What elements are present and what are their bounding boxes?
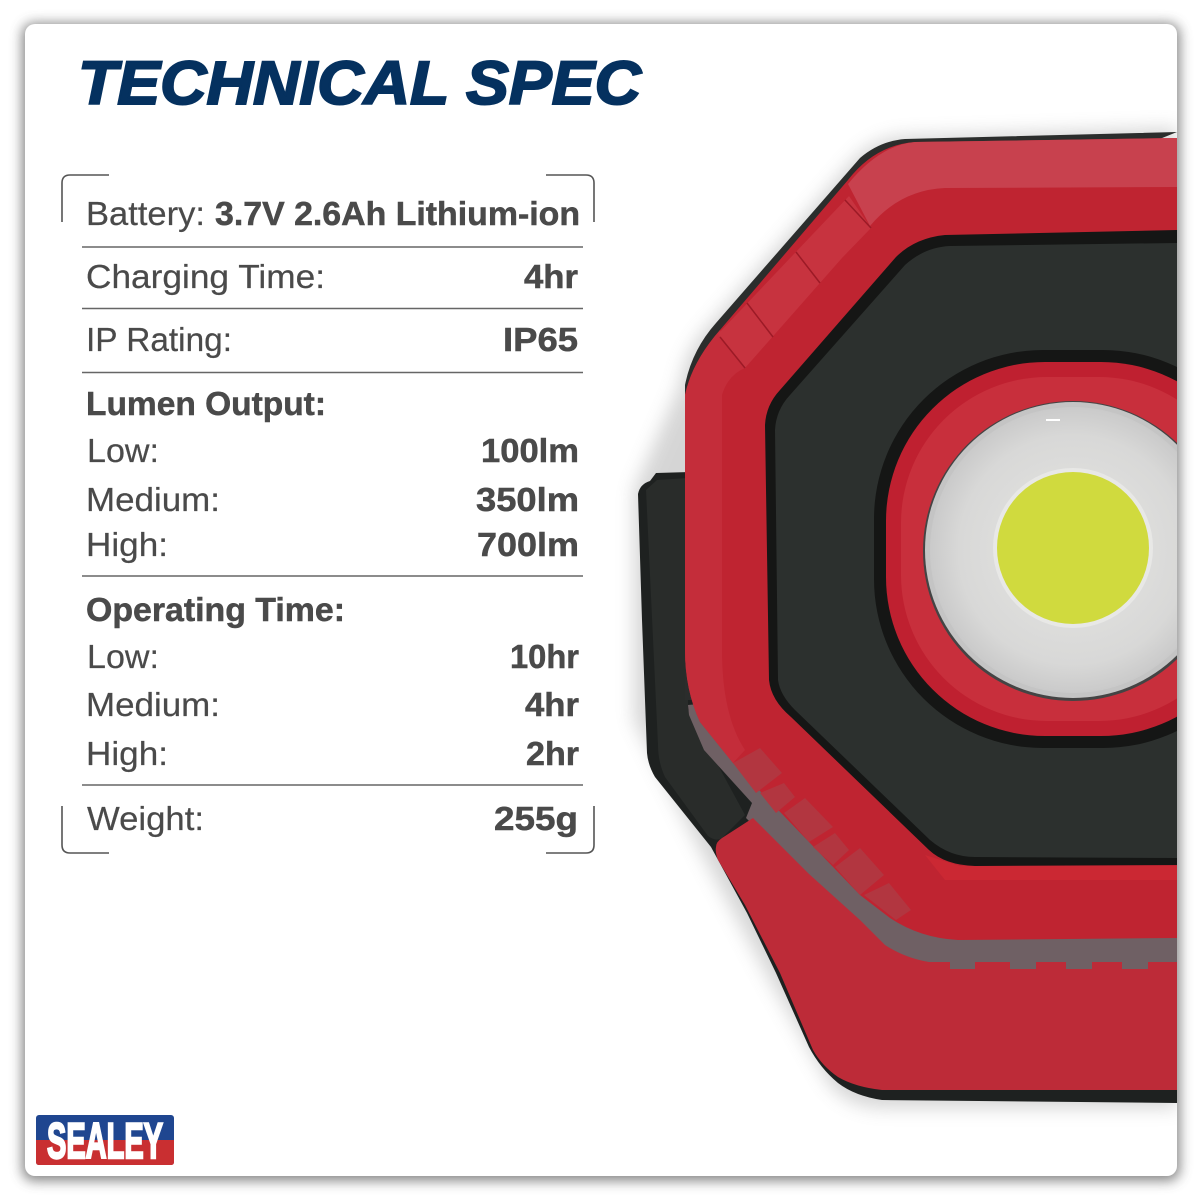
bezel: highlight band bbox=[848, 138, 1177, 226]
section: operating time: Operating Time: bbox=[86, 591, 345, 628]
row: IP rating bbox=[86, 321, 578, 358]
bezel: grip lines bbox=[720, 200, 871, 368]
logo: Sealey bbox=[36, 1113, 174, 1169]
logo: Sealey: SEALEY bbox=[47, 1113, 163, 1169]
dark face plate bbox=[775, 243, 1177, 858]
section: lumen output: Lumen Output: bbox=[86, 385, 326, 422]
bracket: top right bbox=[546, 175, 594, 222]
bracket: top left bbox=[62, 175, 109, 222]
black gasket bbox=[765, 230, 1177, 866]
stand: lighter black panel bbox=[646, 478, 745, 840]
section: operating time: 10hr bbox=[510, 638, 579, 675]
title: TECHNICAL SPEC bbox=[78, 49, 642, 117]
row: IP rating: IP Rating: bbox=[86, 321, 232, 358]
section: lumen output: 350lm bbox=[476, 481, 579, 518]
stand: red base bbox=[716, 818, 1177, 1090]
row: IP rating: IP65 bbox=[503, 321, 578, 358]
bracket: bottom right bbox=[546, 806, 594, 853]
red bezel bbox=[685, 138, 1177, 940]
bezel: left lighter band bbox=[685, 330, 745, 763]
section: operating time: 2hr bbox=[526, 735, 579, 772]
bracket: bottom left bbox=[62, 806, 109, 853]
section: lumen output: 100lm bbox=[481, 432, 579, 469]
section: lumen output: 700lm bbox=[477, 526, 579, 563]
bezel: lower highlight bbox=[925, 855, 1177, 880]
row: charging time: Charging Time: bbox=[86, 258, 325, 295]
spec table bbox=[62, 175, 594, 853]
row: weight: 255g bbox=[494, 800, 578, 837]
back shell edge bbox=[685, 132, 1177, 700]
bezel: translucent grip blocks bbox=[733, 748, 911, 920]
lens ring bbox=[874, 350, 1200, 748]
product photo: work light bbox=[634, 128, 1200, 1108]
row: charging time: 4hr bbox=[524, 258, 578, 295]
row: battery: Battery: bbox=[86, 195, 205, 232]
section: operating time: High: bbox=[86, 735, 168, 772]
stand: black bracket bbox=[638, 472, 1177, 1103]
section: operating time: 4hr bbox=[525, 686, 579, 723]
section: operating time: Low: bbox=[87, 638, 159, 675]
lens bbox=[923, 401, 1200, 701]
grey seal band bbox=[688, 700, 1177, 975]
row: weight: Weight: bbox=[87, 800, 204, 837]
row: charging time bbox=[86, 258, 578, 295]
row: battery: 3.7V 2.6Ah Lithium-ion bbox=[215, 195, 580, 232]
section: lumen output: Low: bbox=[87, 432, 159, 469]
section: lumen output bbox=[86, 385, 579, 563]
section: lumen output: High: bbox=[86, 526, 168, 563]
bezel: grip ridge bbox=[718, 196, 871, 368]
section: lumen output: Medium: bbox=[86, 481, 220, 518]
row: weight bbox=[87, 800, 578, 837]
section: operating time: Medium: bbox=[86, 686, 220, 723]
section: operating time bbox=[86, 591, 579, 772]
LED chip bbox=[993, 468, 1153, 628]
